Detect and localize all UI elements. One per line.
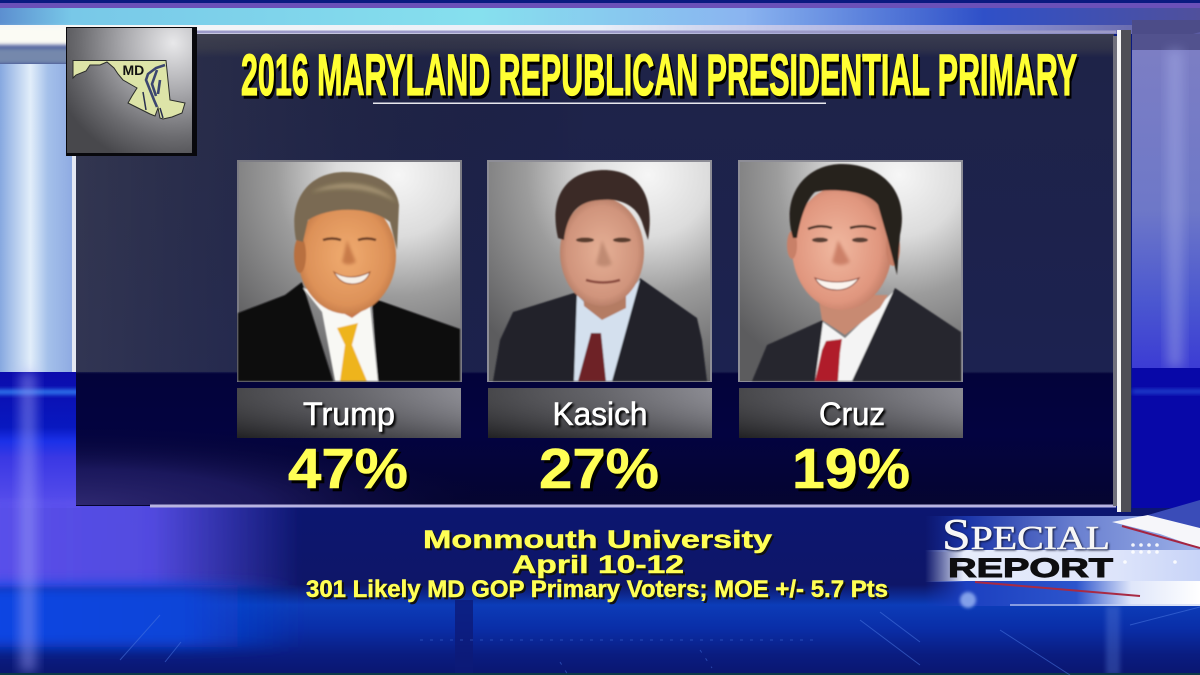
source: poll details: Monmouth University: [423, 526, 772, 554]
value: Cruz 19%: 19%: [792, 437, 910, 501]
photo: Trump: [237, 160, 462, 382]
panel: Kasich: [487, 160, 712, 501]
photo: Cruz: [738, 160, 963, 382]
photo: Kasich: [487, 160, 712, 382]
value: Trump 47%: 47%: [288, 437, 408, 501]
icon: Maryland map tile: MD: [122, 62, 144, 78]
title underline: [373, 102, 826, 104]
name plate: Trump: [237, 388, 461, 438]
logo: Special Report: REPORT: [948, 553, 1114, 583]
value: Kasich 27%: 27%: [539, 437, 659, 501]
name plate: Kasich: [488, 388, 712, 438]
panel: Trump: [237, 160, 462, 501]
source: poll details: [306, 526, 888, 603]
icon: Maryland map tile: [66, 27, 197, 156]
source: poll details: April 10-12: [512, 551, 684, 579]
logo: Special Report: [925, 500, 1200, 608]
name plate: Cruz: Cruz: [819, 396, 885, 432]
name plate: Cruz: [739, 388, 963, 438]
logo: Special Report: SPECIAL: [942, 510, 1110, 559]
name plate: Trump: Trump: [303, 396, 395, 432]
name plate: Kasich: Kasich: [552, 396, 648, 432]
panel: Cruz: [738, 160, 963, 501]
source: poll details: 301 Likely MD GOP Primary Voters; MOE +/- 5.7 Pts: [306, 576, 888, 603]
panel: results board: [74, 30, 1131, 512]
